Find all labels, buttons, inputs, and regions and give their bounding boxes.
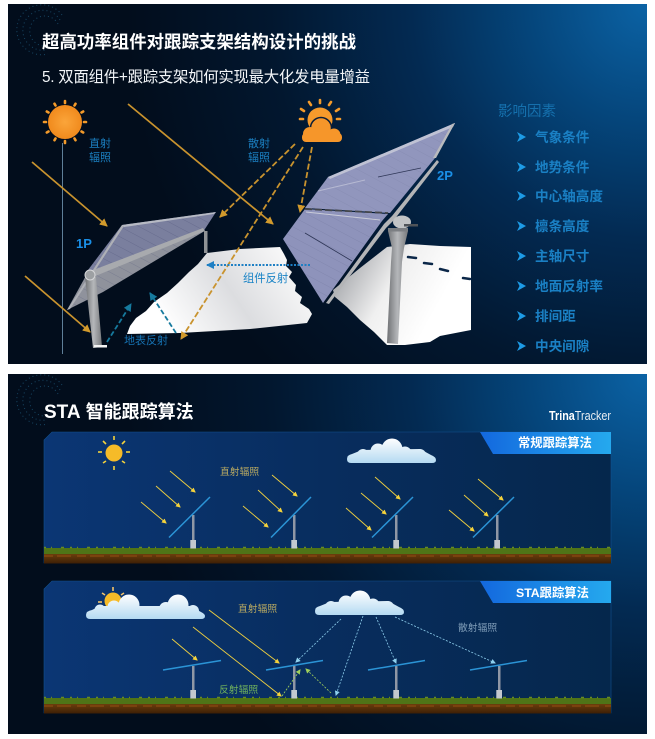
panel: top slide background bbox=[8, 4, 647, 364]
label: 2P: 2P bbox=[437, 168, 453, 183]
factor list heading: 影响因素 bbox=[498, 103, 556, 120]
factor items: 中央间隙 bbox=[535, 338, 590, 354]
logo: TrinaTracker: TrinaTracker bbox=[549, 409, 611, 423]
tracker 1P bbox=[67, 212, 216, 348]
factor items: 中心轴高度 bbox=[535, 188, 603, 204]
label: direct radiation: 直射 bbox=[89, 136, 111, 150]
tracker 2P bbox=[283, 123, 455, 344]
trackers: STA bbox=[163, 660, 527, 698]
tab: conventional bbox=[480, 432, 611, 454]
label: diffuse radiation: 散射辐照 bbox=[458, 621, 497, 634]
ground: STA bbox=[44, 698, 611, 714]
arrows: STA reflected radiation bbox=[282, 669, 331, 696]
label: direct radiation: 辐照 bbox=[89, 150, 111, 164]
arrows: conventional direct radiation bbox=[141, 471, 503, 531]
factor items: 檩条高度 bbox=[535, 218, 590, 234]
icon: cloud with diffuse rays bbox=[315, 590, 404, 615]
label: diffuse radiation: 散射 bbox=[248, 136, 270, 150]
factor items bbox=[535, 129, 603, 354]
panel: conventional tracking bbox=[44, 432, 611, 564]
factor items: 气象条件 bbox=[535, 129, 590, 145]
ground reflection: right white ground bbox=[333, 244, 471, 345]
factor arrow bullets bbox=[517, 132, 526, 351]
panel: STA tracking bbox=[44, 581, 611, 714]
panel: bottom slide background bbox=[8, 374, 647, 734]
subtitle: 5. 双面组件+跟踪支架如何实现最大化发电量增益 bbox=[42, 68, 370, 86]
label: direct radiation: 直射辐照 bbox=[238, 602, 277, 615]
factor items: 地势条件 bbox=[535, 159, 590, 175]
icon: sun behind cloud bbox=[98, 587, 124, 610]
tab: STA bbox=[480, 581, 611, 603]
factor list bbox=[498, 103, 603, 354]
icon: large cloud bbox=[86, 594, 205, 619]
label: diffuse radiation: 辐照 bbox=[248, 150, 270, 164]
label: reflected radiation: 反射辐照 bbox=[219, 683, 258, 696]
factor items: 主轴尺寸 bbox=[535, 248, 589, 264]
trackers: conventional bbox=[169, 497, 514, 548]
arrow: module reflection bbox=[207, 264, 310, 266]
label: diffuse radiation bbox=[248, 136, 270, 164]
icon: sun direct radiation bbox=[44, 101, 86, 143]
factor items: 排间距 bbox=[535, 308, 576, 324]
icon: sun bbox=[98, 436, 130, 470]
factor items: 地面反射率 bbox=[535, 278, 603, 294]
ground reflection: left white ground bbox=[127, 247, 312, 334]
label: direct radiation: 直射辐照 bbox=[220, 465, 259, 478]
label: 1P: 1P bbox=[76, 236, 92, 251]
label: direct radiation bbox=[89, 136, 111, 164]
arrows: STA diffuse radiation bbox=[296, 616, 495, 695]
icon: cloud bbox=[347, 438, 436, 463]
title: bottom slide heading: STA 智能跟踪算法 bbox=[44, 401, 194, 423]
arrows: diffuse radiation bbox=[181, 144, 312, 339]
arrows: STA direct radiation bbox=[172, 610, 281, 696]
arrows: ground reflection bbox=[107, 293, 176, 342]
label: ground reflection: 地表反射 bbox=[124, 333, 168, 347]
arrows: direct radiation bbox=[25, 104, 273, 332]
ground: conventional bbox=[44, 548, 611, 564]
title: top slide heading: 超高功率组件对跟踪支架结构设计的挑战 bbox=[42, 32, 357, 52]
tab: STA: STA跟踪算法 bbox=[516, 585, 589, 600]
label: module reflection: 组件反射 bbox=[243, 271, 288, 285]
tab: conventional: 常规跟踪算法 bbox=[518, 435, 592, 450]
icon: sun behind cloud bbox=[300, 100, 342, 142]
